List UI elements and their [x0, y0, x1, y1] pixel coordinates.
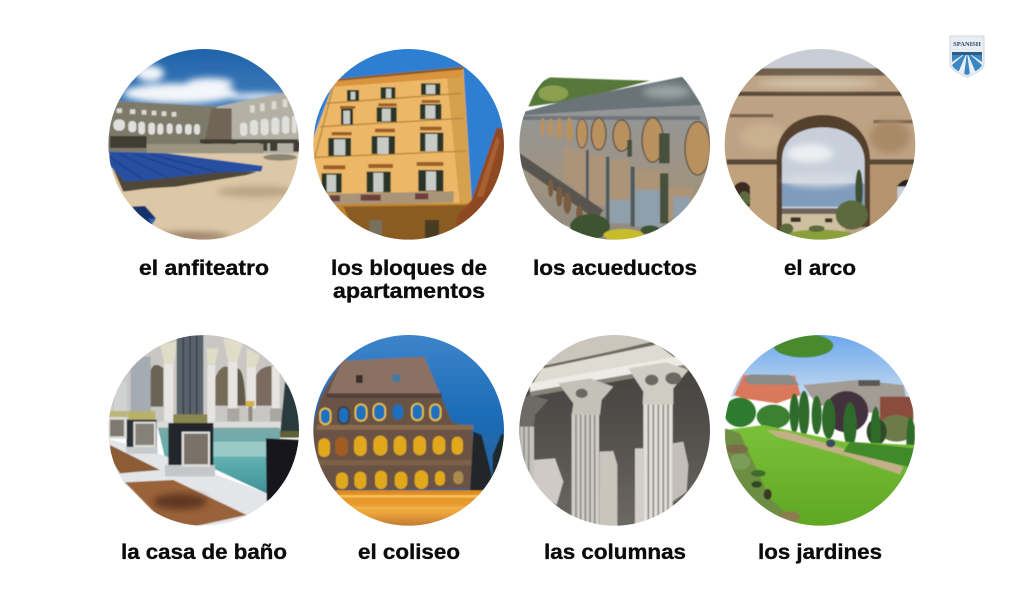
- label: el coliseo: el coliseo: [358, 541, 460, 564]
- label: los acueductos: los acueductos: [533, 257, 697, 280]
- label: las columnas: las columnas: [544, 541, 686, 564]
- image: gardens photo: [723, 333, 920, 532]
- label: el anfiteatro: el anfiteatro: [139, 257, 269, 280]
- image: amphitheatre photo: [108, 49, 299, 240]
- image: arch photo: [723, 47, 920, 247]
- label: los bloques de apartamentos: los bloques de: [331, 257, 487, 280]
- label: el arco: el arco: [784, 257, 856, 280]
- label: la casa de baño: la casa de baño: [121, 541, 287, 564]
- label: los jardines: los jardines: [758, 541, 882, 564]
- image: apartment block photo: [310, 47, 510, 247]
- image: columns photo: [517, 332, 713, 532]
- logo: Spanish academy shield: [950, 36, 984, 77]
- label: los bloques de apartamentos: apartamentos: [333, 280, 485, 303]
- image: bath house photo: [107, 333, 303, 527]
- image: aqueduct photo: [517, 77, 713, 243]
- label: los bloques de apartamentos: [331, 257, 487, 303]
- image: colosseum photo: [310, 332, 510, 534]
- logo: Spanish academy shield: SPANISH: [953, 41, 981, 48]
